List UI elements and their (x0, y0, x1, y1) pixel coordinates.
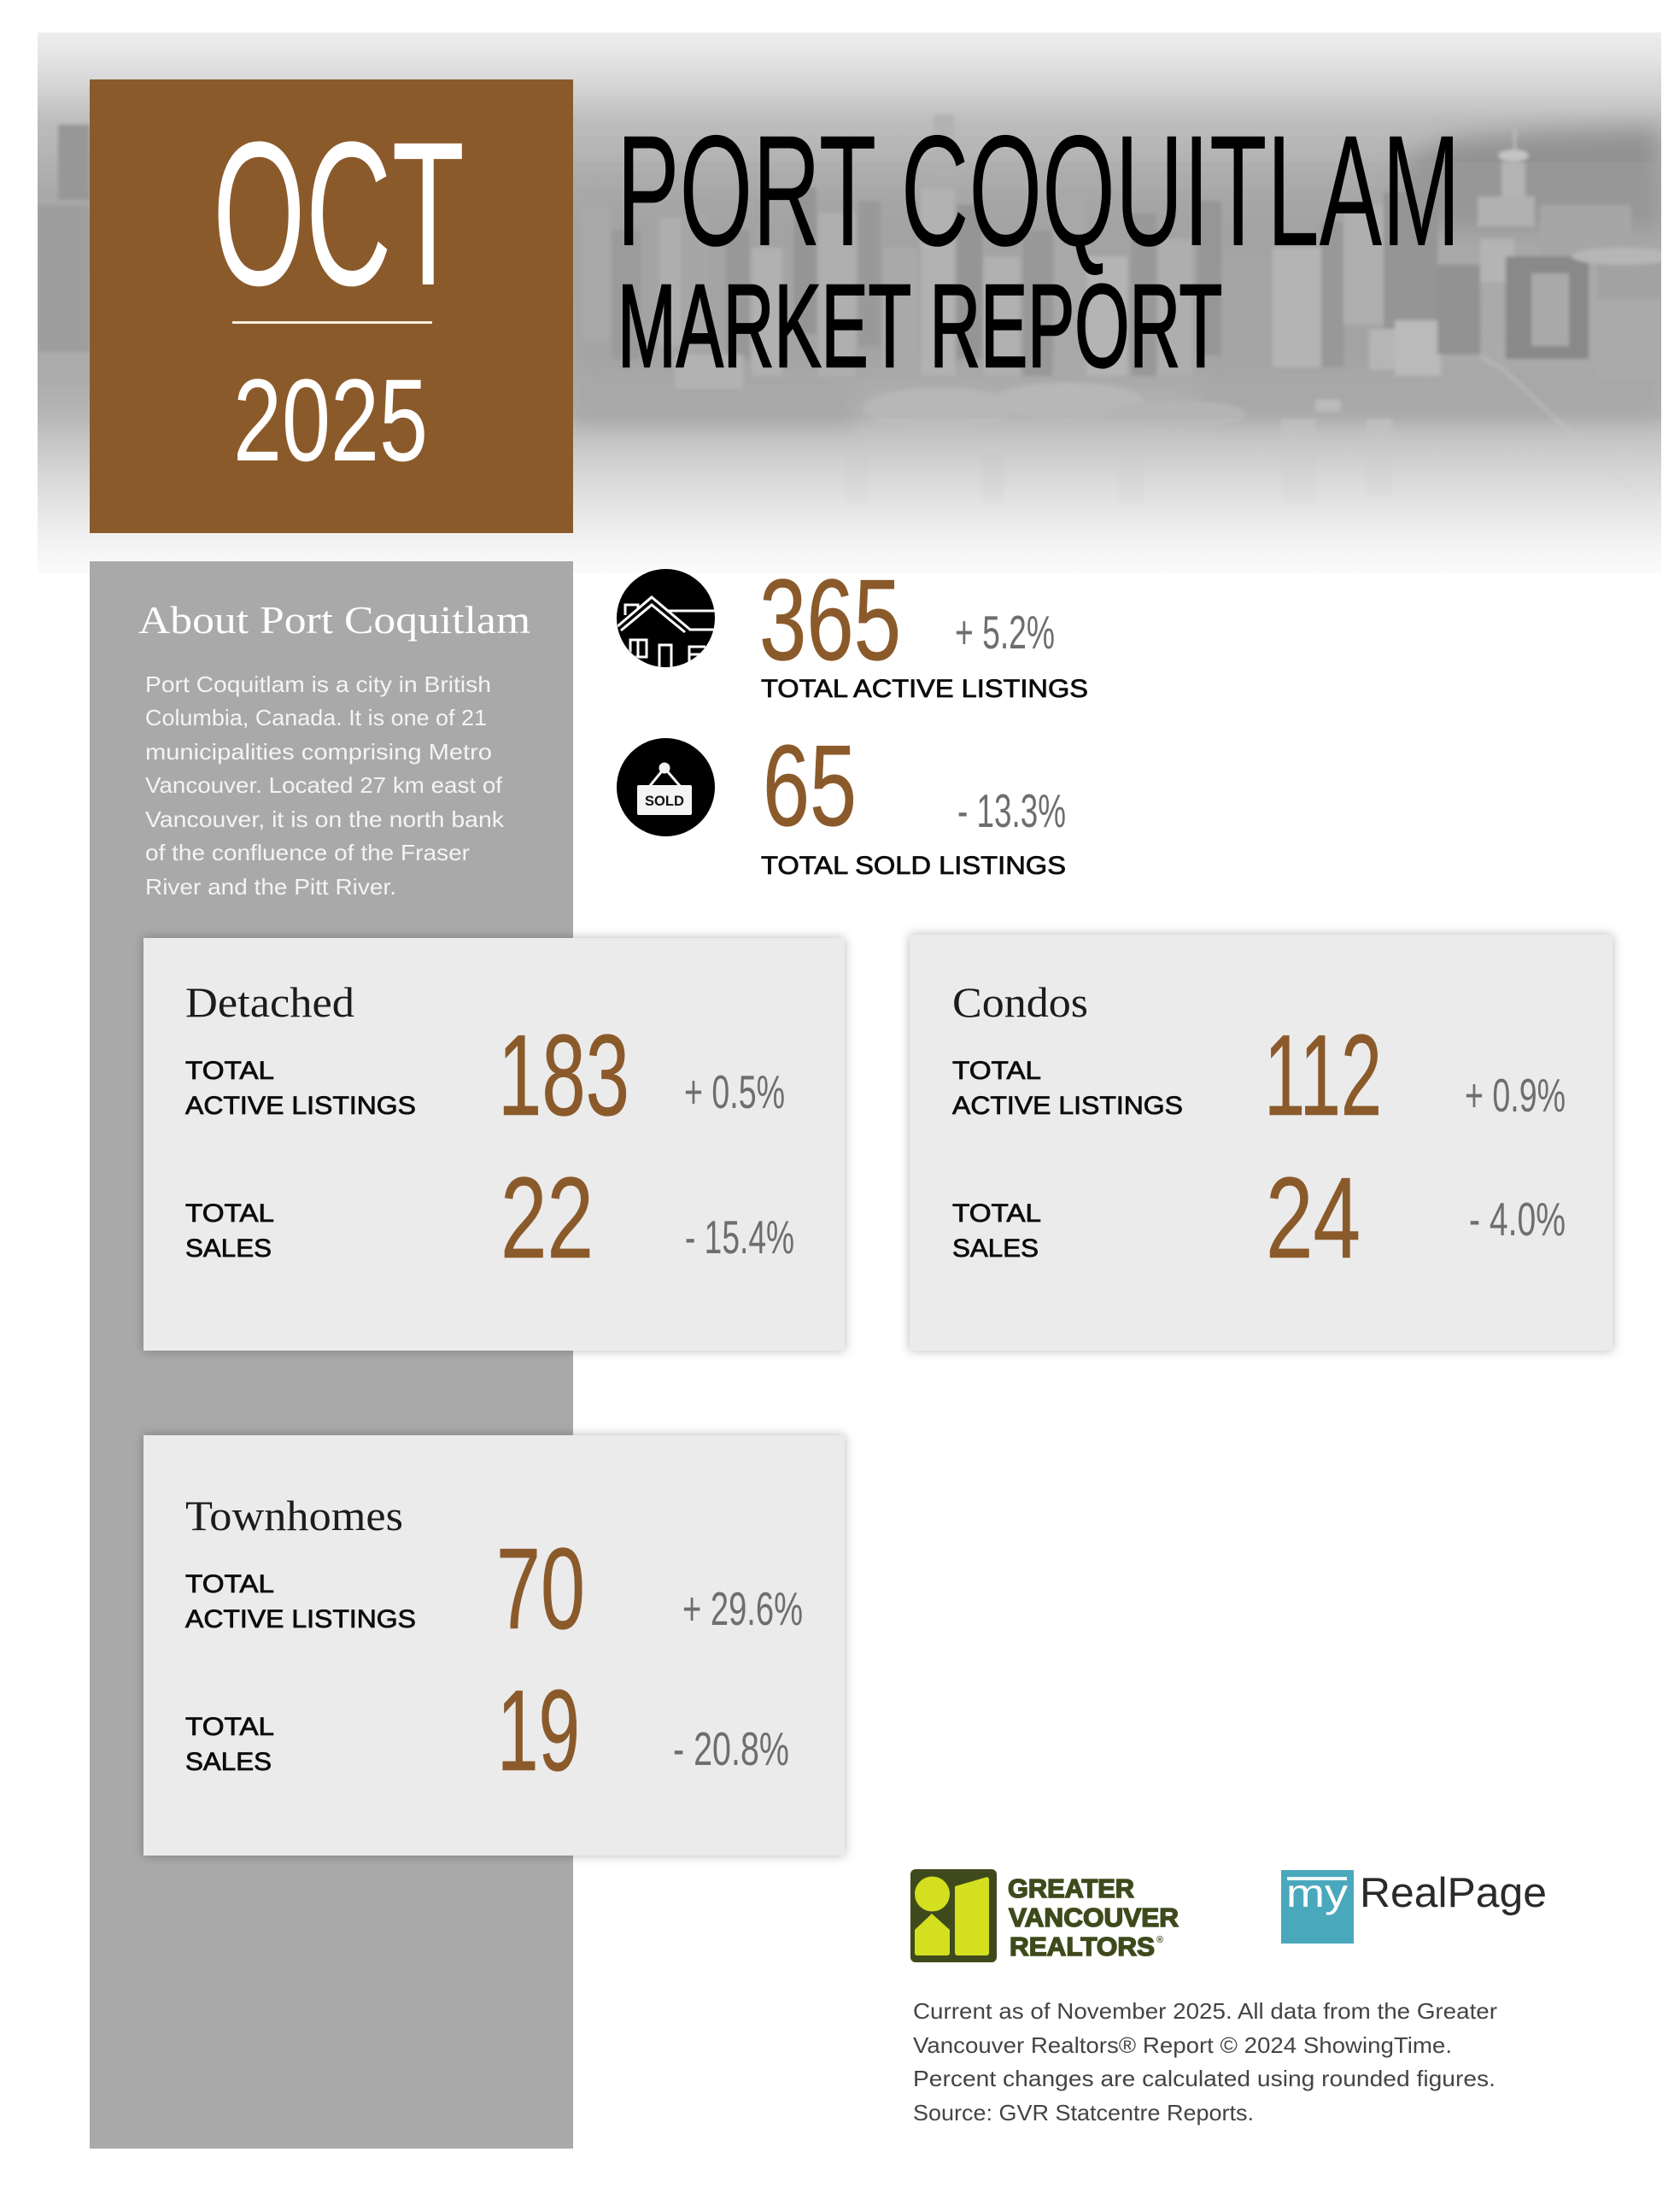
stat: total sold listings: 65 (763, 721, 857, 850)
footer note: Current as of November 2025. All data from the Greater (913, 1998, 1497, 2024)
active listings: TOTAL (185, 1570, 274, 1598)
month: OCT (213, 99, 465, 328)
sales: - 4.0% (1469, 1193, 1566, 1246)
about panel: About Port Coquitlam (138, 598, 530, 642)
date panel (90, 79, 573, 533)
active listings (185, 1524, 803, 1653)
active listings: ACTIVE LISTINGS (952, 1092, 1183, 1120)
sales: TOTAL (952, 1199, 1041, 1228)
year: 2025 (233, 355, 428, 486)
panel: detached (143, 938, 845, 1351)
sales: 24 (1266, 1153, 1361, 1282)
icon: sold sign (617, 738, 715, 836)
sales: 19 (497, 1666, 580, 1795)
about text: Vancouver. Located 27 km east of (145, 772, 503, 798)
sales (185, 1153, 794, 1282)
about text (145, 671, 505, 900)
subtitle: MARKET REPORT (618, 261, 1222, 392)
about text: of the confluence of the Fraser (145, 840, 470, 865)
active listings: ACTIVE LISTINGS (185, 1605, 416, 1633)
footer note: Vancouver Realtors® Report © 2024 ShowingTime. (913, 2032, 1452, 2058)
footer note: Percent changes are calculated using rounded figures. (913, 2066, 1496, 2091)
active listings: + 0.9% (1465, 1069, 1566, 1122)
footer note (913, 1998, 1497, 2125)
heading: condos: Condos (952, 978, 1088, 1026)
stat: total active listings (759, 555, 1088, 703)
logo: myrealpage: my (1286, 1871, 1348, 1915)
panel: condos (910, 935, 1613, 1351)
panel: townhomes (143, 1435, 845, 1856)
stat: total active listings: TOTAL ACTIVE LISTINGS (761, 675, 1088, 703)
logo: greater vancouver realtors (910, 1869, 1179, 1962)
about panel (138, 598, 530, 900)
active listings: 112 (1264, 1011, 1382, 1140)
sales: SALES (952, 1234, 1039, 1263)
active listings: 183 (498, 1011, 629, 1140)
sales: TOTAL (185, 1199, 274, 1228)
about text: River and the Pitt River. (145, 874, 396, 900)
icon: house (617, 569, 716, 671)
active listings: TOTAL (952, 1057, 1041, 1085)
logo: greater vancouver realtors: ® (1156, 1935, 1163, 1945)
stat: total sold listings: TOTAL SOLD LISTINGS (761, 852, 1066, 880)
active listings: + 29.6% (682, 1582, 803, 1635)
stat: total sold listings: - 13.3% (957, 784, 1066, 837)
sidebar (90, 561, 573, 2149)
logo: myrealpage (1281, 1870, 1547, 1944)
logo: greater vancouver realtors: GREATER (1008, 1873, 1134, 1903)
heading: detached: Detached (185, 978, 354, 1026)
active listings: TOTAL (185, 1057, 274, 1085)
logo: greater vancouver realtors: VANCOUVER (1009, 1903, 1179, 1932)
active listings: 70 (496, 1524, 585, 1653)
about text: Vancouver, it is on the north bank (145, 806, 505, 832)
footer note: Source: GVR Statcentre Reports. (913, 2100, 1254, 2125)
active listings (952, 1011, 1566, 1140)
active listings: + 0.5% (684, 1065, 785, 1118)
icon: sold sign: SOLD (645, 793, 684, 809)
active listings (185, 1011, 785, 1140)
sales: TOTAL (185, 1713, 274, 1741)
stat: total active listings: + 5.2% (955, 606, 1055, 659)
header: city skyline photo (38, 32, 1674, 573)
logo: myrealpage: RealPage (1360, 1870, 1547, 1916)
heading: townhomes: Townhomes (185, 1492, 403, 1539)
sales: SALES (185, 1748, 272, 1776)
sales: - 20.8% (673, 1722, 789, 1775)
title (617, 103, 1460, 392)
logo: greater vancouver realtors: REALTORS (1010, 1932, 1155, 1961)
active listings: ACTIVE LISTINGS (185, 1092, 416, 1120)
about text: municipalities comprising Metro (145, 739, 492, 765)
sales: 22 (500, 1153, 594, 1282)
stat: total active listings: 365 (759, 555, 901, 684)
stat: total sold listings (761, 721, 1066, 880)
sales (185, 1666, 789, 1795)
sales: SALES (185, 1234, 272, 1263)
sales (952, 1153, 1566, 1282)
about text: Columbia, Canada. It is one of 21 (145, 705, 487, 730)
sales: - 15.4% (685, 1211, 794, 1264)
about text: Port Coquitlam is a city in British (145, 671, 491, 697)
